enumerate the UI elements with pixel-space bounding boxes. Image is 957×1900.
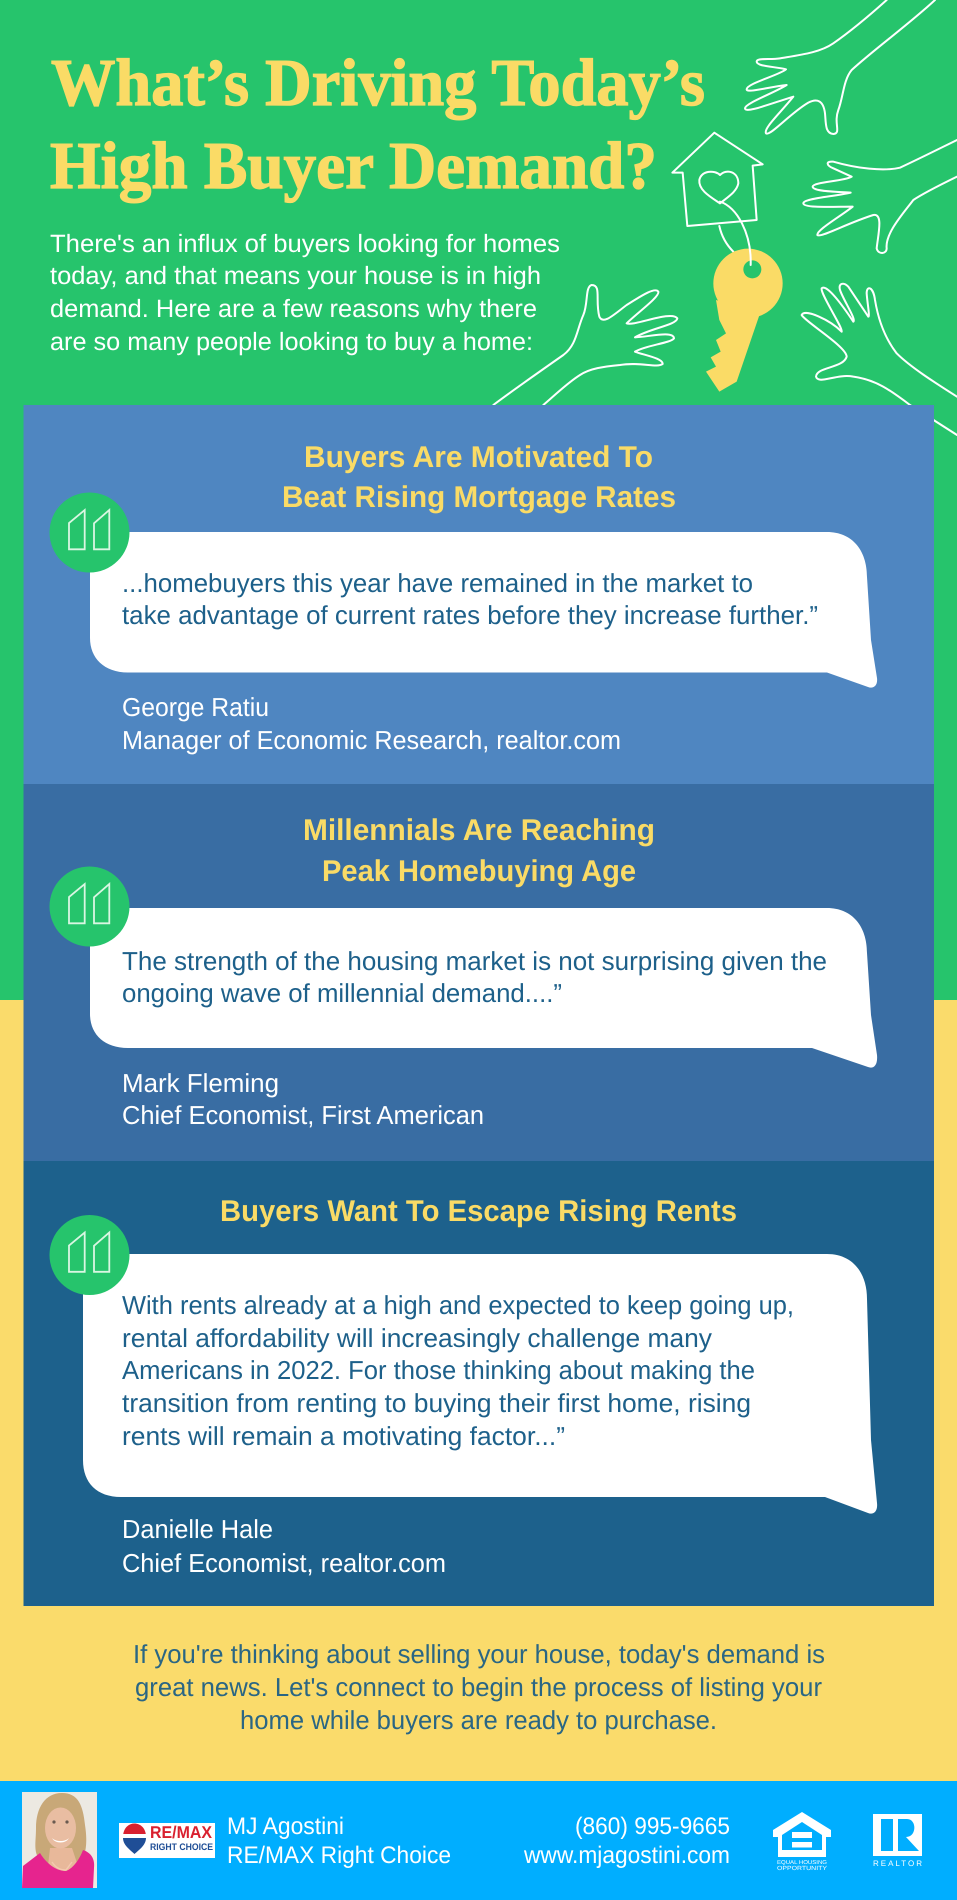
key (706, 202, 783, 392)
attribution: Mark Fleming (122, 1068, 279, 1098)
intro text: today, and that means your house is in high (50, 262, 541, 290)
footer bar (0, 1781, 957, 1900)
attribution: George Ratiu (122, 692, 269, 722)
heading: Peak Homebuying Age (322, 855, 636, 888)
illustration: hands, house and key (493, 0, 957, 435)
icon: equal housing opportunity: EQUAL HOUSING (777, 1860, 827, 1866)
icon: quote mark (50, 866, 130, 946)
attribution: Manager of Economic Research, realtor.com (122, 725, 621, 755)
intro text: There's an influx of buyers looking for homes (50, 230, 560, 258)
intro text: demand. Here are a few reasons why there (50, 295, 537, 323)
agent name and company: RE/MAX Right Choice (227, 1842, 451, 1869)
heart (699, 172, 738, 203)
speech bubble (90, 532, 877, 688)
intro text: are so many people looking to buy a home: (50, 328, 533, 356)
panel background (24, 784, 934, 1161)
heading (282, 441, 676, 514)
call to action text: great news. Let's connect to begin the process of listing your (135, 1672, 822, 1702)
agent photo (22, 1792, 97, 1888)
panel background (24, 1161, 934, 1606)
hand: top right (745, 0, 935, 134)
title (50, 46, 705, 203)
hand: bottom left (493, 285, 677, 405)
agent name and company: MJ Agostini (227, 1813, 344, 1840)
icon: equal housing opportunity: OPPORTUNITY (777, 1865, 827, 1872)
attribution (122, 1068, 484, 1130)
RE/MAX logo: RE/MAX (150, 1823, 213, 1842)
hands outline (493, 0, 957, 435)
icon: realtor logo: REALTOR (873, 1859, 922, 1868)
phone and website: www.mjagostini.com (523, 1842, 730, 1869)
background: green top (0, 0, 957, 1000)
speech bubble (83, 1254, 877, 1514)
call to action text (133, 1639, 825, 1735)
heading: Buyers Want To Escape Rising Rents (220, 1195, 737, 1228)
quote text: transition from renting to buying their first home, rising (122, 1388, 751, 1418)
quote text: ongoing wave of millennial demand....” (122, 978, 562, 1008)
quote text: rental affordability will increasingly challenge many (122, 1323, 712, 1353)
panel: rising rents (24, 1161, 934, 1606)
heading: Beat Rising Mortgage Rates (282, 481, 676, 514)
call to action text: home while buyers are ready to purchase. (240, 1705, 717, 1735)
phone and website (523, 1813, 730, 1869)
title: What’s Driving Today’s (51, 46, 705, 120)
footer (0, 1781, 957, 1900)
house with heart (672, 133, 763, 226)
hand: middle right (803, 140, 957, 253)
quote text (122, 946, 827, 1008)
quote text: With rents already at a high and expected to keep going up, (122, 1290, 794, 1320)
icon: realtor logo (873, 1814, 922, 1868)
hand: bottom right (802, 284, 957, 435)
quote text: Americans in 2022. For those thinking about making the (122, 1355, 755, 1385)
quote text (122, 568, 818, 630)
intro text (50, 230, 560, 356)
panel: millennials (24, 784, 934, 1161)
heading: Buyers Are Motivated To (304, 441, 653, 474)
quote text: ...homebuyers this year have remained in the market to (122, 568, 753, 598)
call to action text: If you're thinking about selling your house, today's demand is (133, 1639, 825, 1669)
attribution: Danielle Hale (122, 1514, 273, 1544)
RE/MAX logo (119, 1823, 215, 1858)
attribution: Chief Economist, realtor.com (122, 1548, 446, 1578)
key cord (719, 226, 733, 252)
agent name and company (227, 1813, 451, 1869)
RE/MAX logo: RIGHT CHOICE (150, 1842, 213, 1853)
quote text (122, 1290, 794, 1451)
speech bubble (90, 908, 877, 1068)
attribution (122, 1514, 446, 1578)
panel background (24, 405, 934, 784)
quote text: take advantage of current rates before they increase further.” (122, 600, 818, 630)
panel: motivated buyers (24, 405, 934, 784)
quote text: The strength of the housing market is not surprising given the (122, 946, 827, 976)
phone and website: (860) 995-9665 (575, 1813, 730, 1840)
attribution: Chief Economist, First American (122, 1100, 484, 1130)
heading: Millennials Are Reaching (303, 814, 655, 847)
icon: quote mark (50, 492, 130, 572)
quote text: rents will remain a motivating factor...” (122, 1421, 565, 1451)
icon: equal housing opportunity (773, 1812, 831, 1872)
heading (303, 814, 655, 888)
attribution (122, 692, 621, 755)
background: yellow bottom (0, 1000, 957, 1781)
icon: quote mark (50, 1215, 130, 1295)
title: High Buyer Demand? (50, 129, 657, 203)
